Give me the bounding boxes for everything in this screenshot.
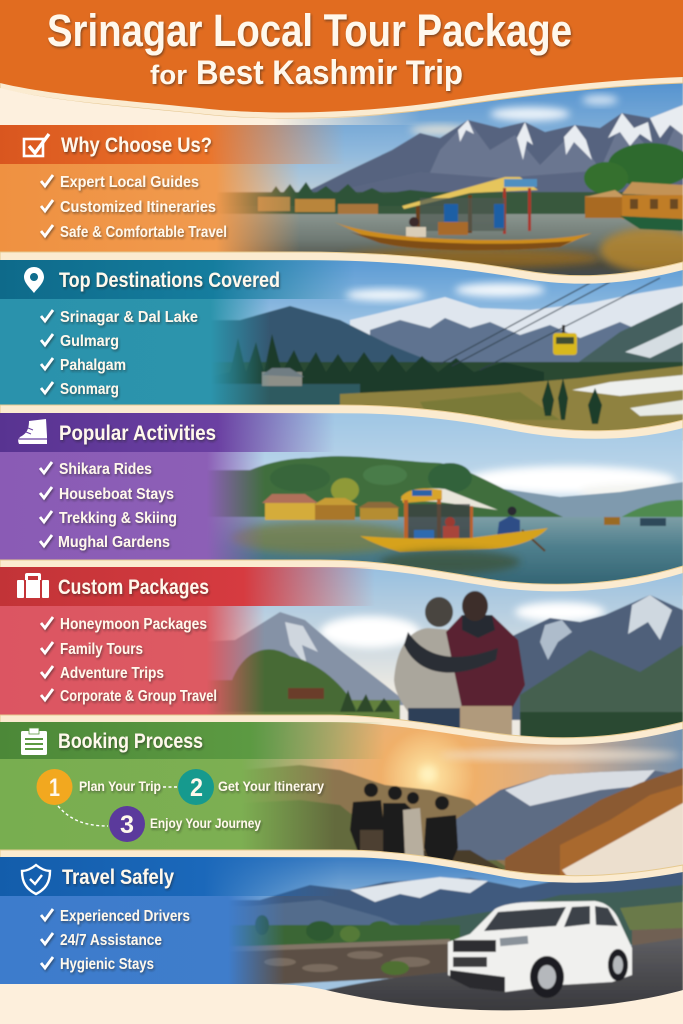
body band: [0, 896, 285, 984]
panel: travel safely: [0, 857, 340, 984]
icon: map pin: [24, 267, 44, 293]
list: safety features: Hygienic Stays: [60, 956, 154, 973]
step 3: [109, 806, 261, 842]
icon: clipboard: [21, 728, 47, 755]
title line 1: Srinagar Local Tour Package: [47, 5, 572, 56]
panel: top destinations: [0, 260, 355, 406]
body band: [0, 164, 300, 253]
list: packages: Corporate & Group Travel: [60, 688, 217, 705]
panel: popular activities: [0, 413, 335, 560]
photo: couple overlooking mountains: [210, 567, 683, 738]
list: destinations: Pahalgam: [60, 357, 126, 374]
list: activities: Trekking & Skiing: [59, 510, 177, 527]
step 1: 1: [49, 774, 60, 802]
list: activities: [40, 461, 177, 551]
list: packages: Family Tours: [60, 641, 143, 658]
photo: lake with shikara and houseboats: [209, 413, 683, 584]
list: destinations: Gulmarg: [60, 333, 119, 350]
body band: [0, 299, 270, 406]
list: reasons: Customized Itineraries: [60, 199, 216, 216]
title banner: [0, 0, 683, 119]
icon: checkbox: [24, 134, 49, 156]
step 2: Get Your Itinerary: [218, 778, 324, 794]
header band: [0, 413, 335, 452]
photo: Dal Lake shikara and mountains: [216, 84, 683, 276]
list: reasons: [41, 174, 227, 241]
title line 2: Best Kashmir Trip: [196, 54, 463, 92]
panel: custom packages: [0, 567, 375, 715]
couple: [394, 591, 525, 736]
list: safety features: Experienced Drivers: [60, 908, 190, 925]
header band: [0, 567, 375, 606]
step 2: [178, 769, 324, 805]
divider wave 5: [0, 850, 683, 890]
title text: [47, 5, 572, 92]
header band: [0, 722, 385, 759]
list: activities: Mughal Gardens: [58, 534, 170, 551]
icon: shield: [22, 865, 50, 894]
houseboat at right: [584, 143, 683, 231]
group silhouettes: [350, 783, 458, 866]
photo: Gulmarg gondola and meadow: [212, 260, 683, 430]
step 2: 2: [190, 774, 203, 802]
panel: booking process: [0, 722, 385, 851]
connectors: [58, 787, 178, 826]
heading: why choose us: Why Choose Us?: [61, 134, 212, 157]
shikara boat: [334, 177, 592, 250]
shikara boat: [360, 488, 548, 552]
divider wave 2: [0, 405, 683, 440]
list: packages: Adventure Trips: [60, 665, 164, 682]
list: packages: [41, 616, 217, 705]
heading: booking process: Booking Process: [58, 730, 203, 753]
title line 2 prefix: for: [150, 60, 187, 90]
header band: [0, 125, 345, 164]
step 1: [36, 769, 161, 805]
list: safety features: 24/7 Assistance: [60, 932, 162, 949]
cream fade under title: [0, 88, 440, 125]
heading: travel safely: Travel Safely: [62, 866, 174, 889]
panel: why choose us: [0, 125, 345, 253]
list: activities: Houseboat Stays: [59, 486, 174, 503]
list: safety features: [41, 908, 190, 973]
list: destinations: Sonmarg: [60, 381, 119, 398]
body band: [0, 759, 335, 851]
body band: [0, 452, 265, 560]
list: destinations: Srinagar & Dal Lake: [60, 309, 198, 326]
SUV: [448, 901, 632, 998]
list: packages: Honeymoon Packages: [60, 616, 207, 633]
divider wave 4: [0, 715, 683, 750]
header band: [0, 857, 340, 896]
divider wave 1: [0, 252, 683, 285]
list: reasons: Expert Local Guides: [60, 174, 199, 191]
heading: custom packages: Custom Packages: [58, 576, 209, 599]
divider wave 3: [0, 560, 683, 595]
step 3: Enjoy Your Journey: [150, 815, 261, 831]
heading: popular activities: Popular Activities: [59, 422, 216, 445]
header band: [0, 260, 355, 299]
list: activities: Shikara Rides: [59, 461, 152, 478]
step 1: Plan Your Trip: [79, 778, 161, 794]
list: reasons: Safe & Comfortable Travel: [60, 224, 227, 241]
heading: top destinations: Top Destinations Covered: [59, 269, 280, 292]
list: destinations: [41, 309, 198, 398]
photo: SUV on mountain road: [210, 857, 683, 1010]
step 3: 3: [120, 811, 134, 839]
icon: suitcase: [17, 573, 49, 598]
body band: [0, 606, 265, 715]
icon: hiking boot: [18, 419, 47, 444]
photo: group at mountain sunset: [246, 722, 683, 875]
